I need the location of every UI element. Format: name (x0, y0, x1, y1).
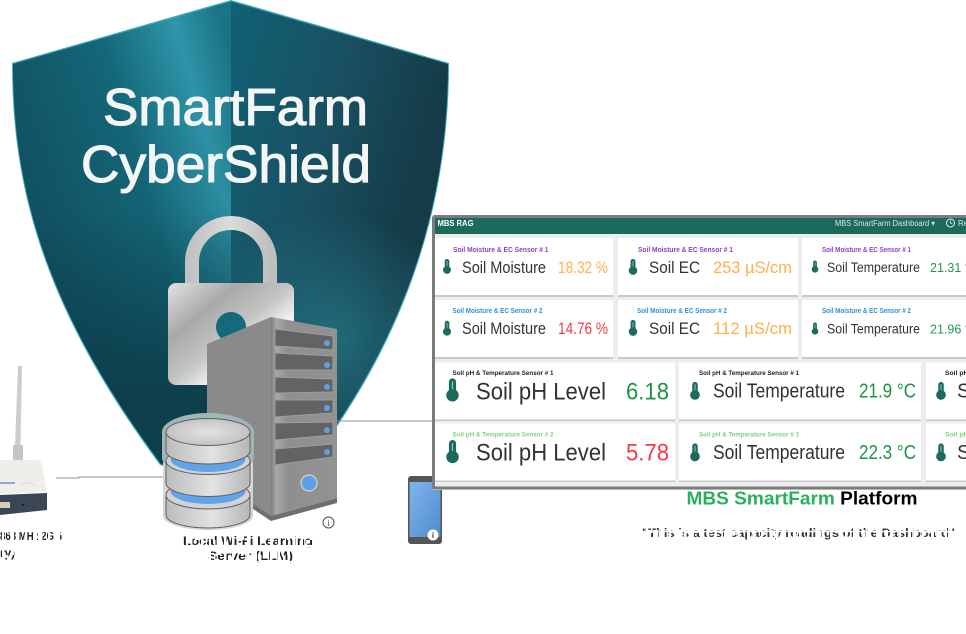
card: soil pH sensor 1 (435, 362, 675, 420)
card: soil temperature pH sensor 1: 21.9 °C (859, 380, 916, 402)
card: soil moisture sensor 1: Soil Moisture & EC Sensor # 1 (453, 247, 549, 254)
icon: padlock (168, 223, 294, 385)
card: partial sensor 2 (926, 424, 966, 480)
card: soil temperature pH sensor 2: 22.3 °C (859, 442, 916, 464)
connector: server to dashboard (336, 420, 433, 422)
label: gateway: ry) (0, 548, 15, 560)
card: soil pH sensor 1: Soil pH Level (476, 378, 606, 405)
card: soil pH sensor 2 (435, 424, 675, 480)
shield title: CyberShield (81, 136, 371, 194)
card: soil temperature sensor 2: Soil Temperature (827, 322, 920, 336)
label: local server: Local Wi-Fi Learning (183, 536, 313, 548)
card: soil temperature pH sensor 1: Soil Temperature (713, 380, 845, 402)
icon: database stack (162, 413, 254, 530)
card: soil EC sensor 2: 112 µS/cm (713, 319, 792, 338)
icon: server info: i (328, 519, 330, 528)
platform caption: "This is a test capacity readings of the Dashboard" (642, 528, 955, 540)
card: soil temperature sensor 2 (802, 300, 966, 357)
card shadows (435, 295, 966, 482)
label: gateway: 868 MHz 2G 5 (0, 531, 62, 543)
card: soil EC sensor 1: Soil Moisture & EC Sensor # 1 (638, 247, 733, 254)
card: soil pH sensor 2: Soil pH Level (476, 440, 606, 466)
card: soil temperature pH sensor 1: Soil pH & Temperature Sensor # 1 (699, 370, 799, 377)
card: soil temperature pH sensor 2: Soil Temperature (713, 442, 845, 464)
card: soil EC sensor 1: Soil EC (649, 258, 700, 277)
card: soil temperature sensor 2: Soil Moisture & EC Sensor # 2 (822, 308, 911, 315)
platform heading: MBS SmartFarm Platform (686, 488, 918, 508)
card: soil temperature pH sensor 1 (679, 362, 921, 420)
card: soil temperature sensor 1: Soil Temperature (827, 260, 920, 275)
card: soil temperature sensor 1 (802, 238, 966, 295)
shield (12, 0, 449, 480)
card: soil moisture sensor 1 (435, 238, 613, 295)
icon: server tower (207, 317, 337, 521)
dashboard header: MBS RAG (438, 219, 474, 228)
platform caption (640, 525, 957, 542)
card: soil pH sensor 1: Soil pH & Temperature Sensor # 1 (452, 370, 554, 377)
icon: smartphone (408, 476, 442, 544)
card: partial sensor 1 (926, 362, 966, 420)
icon: server info (323, 517, 334, 528)
card: soil pH sensor 1: 6.18 (626, 378, 669, 405)
card: soil moisture sensor 2 (435, 300, 613, 357)
card: soil moisture sensor 2: Soil Moisture & EC Sensor # 2 (452, 308, 543, 315)
shield title (81, 79, 371, 194)
card: soil pH sensor 2: Soil pH & Temperature Sensor # 2 (452, 432, 554, 438)
card: soil moisture sensor 1: 18.32 % (558, 259, 608, 277)
card: soil EC sensor 1: 253 µS/cm (713, 258, 792, 277)
label: local server: Server (LLM) (208, 551, 293, 563)
card: soil moisture sensor 1: Soil Moisture (462, 259, 546, 277)
drive bays (275, 329, 333, 465)
panel: dashboard (432, 215, 966, 490)
card: soil moisture sensor 2: Soil Moisture (462, 320, 546, 338)
icon: wireless router (0, 366, 47, 515)
dashboard header: MBS SmartFarm Dashboard ▾ (835, 219, 935, 228)
card: soil moisture sensor 2: 14.76 % (558, 320, 608, 338)
label: gateway (0, 528, 64, 560)
card: soil EC sensor 1 (618, 238, 798, 295)
label: local server (180, 533, 316, 564)
connector: router to database (56, 477, 166, 478)
card: soil temperature pH sensor 2: Soil pH & Temperature Sensor # 1 (699, 432, 799, 438)
card: soil temperature pH sensor 2 (679, 424, 921, 480)
card: soil pH sensor 2: 5.78 (626, 440, 669, 466)
card: soil EC sensor 2: Soil EC (649, 319, 700, 338)
icon: smartphone: i (432, 531, 434, 540)
shield title: SmartFarm (103, 79, 368, 137)
card: soil temperature sensor 1: Soil Moisture & EC Sensor # 1 (822, 247, 911, 254)
dashboard header (435, 218, 966, 234)
card: soil EC sensor 2 (618, 300, 798, 357)
card: soil EC sensor 2: Soil Moisture & EC Sensor # 2 (637, 308, 727, 315)
